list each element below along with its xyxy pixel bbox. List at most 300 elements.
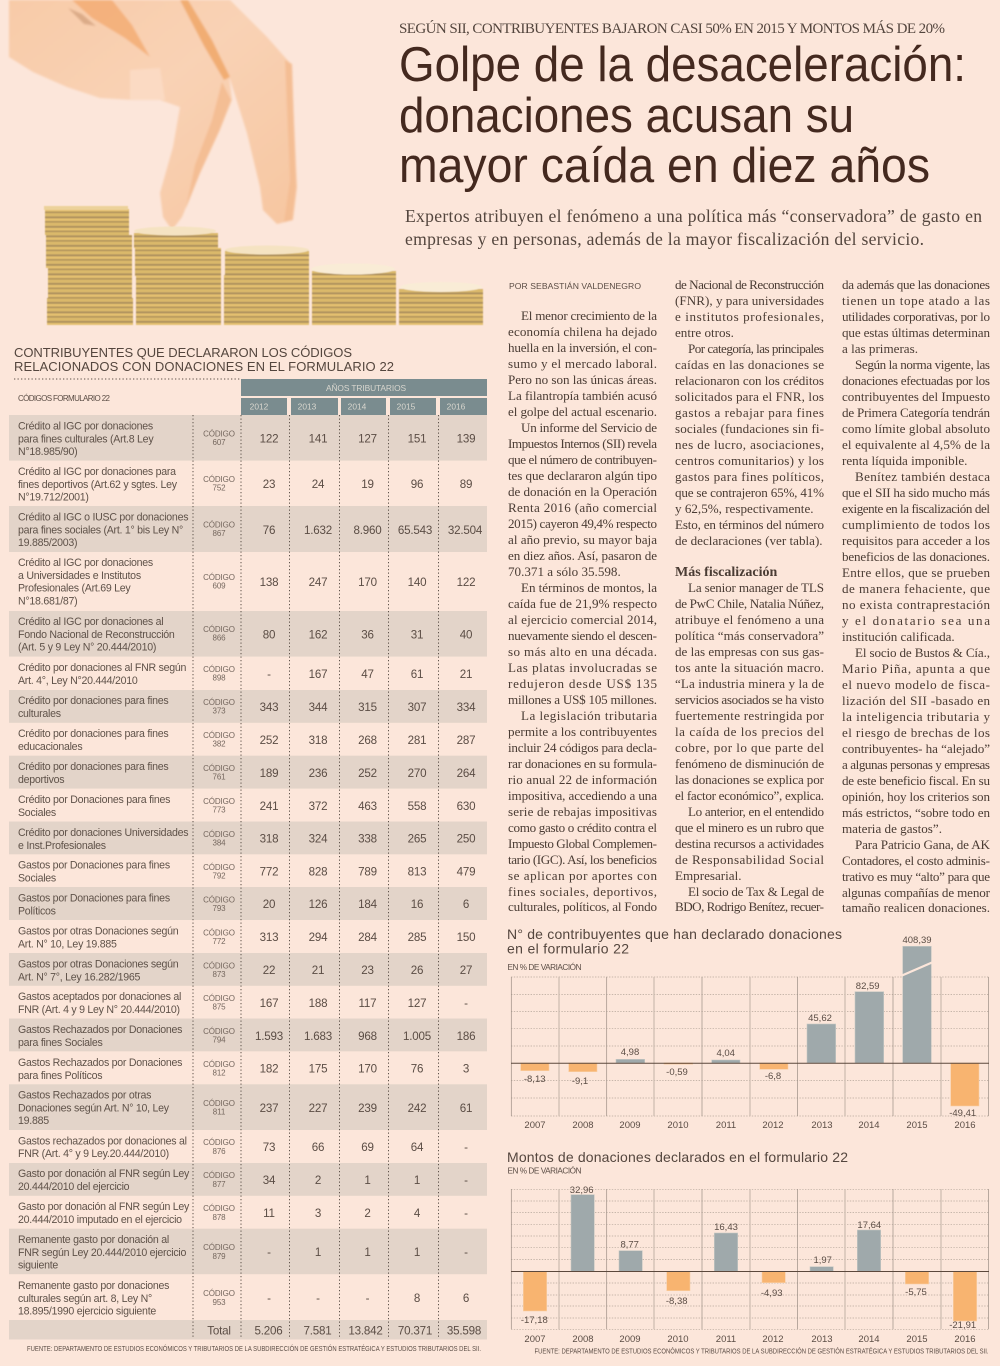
row: código 877	[9, 1163, 487, 1196]
row: código 609: 247	[309, 576, 327, 589]
row: código 772: 772	[212, 937, 226, 946]
row: código 877: Gasto por donación al FNR según Ley	[18, 1168, 190, 1180]
article column 2: El socio de Tax & Legal de	[688, 884, 824, 899]
chart 2: donation amounts declared, % change: 1,97	[813, 1255, 832, 1266]
article column 3: y el donatario sea una	[842, 613, 990, 628]
chart 1: taxpayers declaring donations, % change: 2007	[524, 1120, 546, 1131]
chart 1: taxpayers declaring donations, % change: 2008	[572, 1120, 594, 1131]
row: código 867: Crédito al IGC o IUSC por donaciones	[18, 512, 188, 524]
row: código 878: CÓDIGO	[203, 1204, 235, 1213]
article column 1	[508, 308, 657, 914]
row: código 609: 140	[408, 576, 426, 589]
chart 1 heading: en el formulario 22	[507, 940, 629, 956]
coin stack 3	[224, 246, 309, 325]
row: código 812: 3	[463, 1062, 469, 1076]
row: código 878: 3	[315, 1207, 321, 1220]
row: código 953: Remanente gasto por donaciones	[18, 1280, 169, 1292]
chart 2: donation amounts declared, % change: 2016	[954, 1334, 976, 1345]
row: código 878: 2	[364, 1207, 371, 1220]
row: código 793: 20	[263, 898, 275, 911]
row: totals: 5.206	[254, 1324, 283, 1338]
row: código 792: CÓDIGO	[203, 863, 235, 872]
row: código 811: CÓDIGO	[203, 1099, 235, 1108]
coin stack 5	[399, 282, 483, 325]
article column 2: sociales (fundaciones sin fi-	[675, 421, 824, 436]
row: código 761: 252	[358, 767, 377, 780]
chart 1 heading: N° de contribuyentes que han declarado donaciones	[507, 926, 842, 942]
article column 3: beneficios de las donaciones.	[842, 549, 990, 564]
chart 2: donation amounts declared, % change: -17,18	[521, 1315, 548, 1326]
article column 3: Contadores, el costo adminis-	[842, 853, 990, 868]
article column 3	[842, 277, 991, 915]
row: código 772: 150	[457, 931, 475, 944]
row: código 898	[18, 662, 472, 687]
row: código 875: 875	[212, 1002, 226, 1012]
article column 2: el factor económico”, explica.	[675, 788, 824, 803]
article column 2: cobre, por lo que parte del	[675, 740, 824, 755]
chart 1: taxpayers declaring donations, % change: -8,13	[524, 1074, 546, 1085]
row: código 876	[18, 1136, 468, 1160]
row: código 812: 812	[212, 1068, 226, 1078]
row: código 382	[18, 728, 475, 753]
article column 2: e institutos profesionales,	[675, 309, 824, 324]
article column 3: da además que las donaciones	[842, 277, 990, 292]
row: código 953: culturales según art. 8, Ley N°	[18, 1293, 152, 1305]
row: código 384: 324	[309, 832, 328, 846]
axis break on 2015 bar	[902, 962, 932, 976]
article column 3: tienen un tope atado a las	[842, 293, 990, 308]
row: código 752: 19	[361, 478, 374, 491]
row: código 877: 20.444/2010 del ejercicio	[18, 1181, 130, 1193]
row: código 772: 284	[358, 931, 378, 944]
article column 1: economía chilena ha dejado	[508, 324, 657, 339]
row: código 773: Crédito por Donaciones para fines	[18, 794, 170, 806]
row: código 609: 138	[260, 576, 278, 589]
article column 3: que el SII ha sido mucho más	[842, 485, 990, 500]
article column 1: en diez años. Así, pasaron de	[508, 548, 657, 563]
row: código 752: 96	[411, 478, 423, 491]
row: código 867: 65.543	[398, 524, 432, 537]
article column 1: como gasto o crédito contra el	[508, 820, 657, 835]
row: código 373	[9, 690, 487, 723]
article column 3: opinión, hoy los criterios son	[842, 789, 990, 804]
chart 1: taxpayers declaring donations, % change: 82,59	[856, 981, 880, 992]
row: código 898: 61	[411, 668, 423, 681]
article column 2: de Nacional de Reconstrucción	[675, 277, 824, 292]
article column 3: exigente en la fiscalización del	[842, 501, 990, 516]
chart 1: taxpayers declaring donations, % change: 2015	[906, 1120, 928, 1131]
row: código 811: 19.885	[18, 1115, 49, 1127]
article column 1: La filantropía también acusó	[508, 388, 657, 403]
row: código 873: 27	[460, 964, 472, 977]
row: código 812: para fines Políticos	[18, 1070, 102, 1082]
row: código 792: 789	[358, 866, 377, 878]
row: totals: Total	[207, 1324, 231, 1338]
row: código 792: 479	[457, 866, 475, 878]
row: código 772: Gastos por otras Donaciones según	[18, 926, 179, 938]
article column 2: Lo anterior, en el entendido	[688, 804, 824, 819]
article column 2: de las empresas con sus gas-	[675, 644, 824, 659]
row: código 772: 285	[408, 931, 426, 944]
byline: POR SEBASTIÁN VALDENEGRO	[509, 281, 641, 291]
row: código 873: Gastos por otras Donaciones según	[18, 958, 179, 970]
row: código 792: Sociales	[18, 872, 56, 884]
row: código 811: 811	[213, 1108, 226, 1116]
row: código 879: 1	[414, 1246, 420, 1259]
row: código 761	[9, 756, 487, 789]
chart 1 heading	[507, 926, 842, 972]
row: código 792: Gastos por Donaciones para fines	[18, 860, 170, 872]
row: código 794: 1.593	[255, 1030, 283, 1043]
table: donation codes by tax year	[9, 379, 487, 1340]
row: código 609: N°18.681/87)	[18, 595, 77, 607]
row: código 875: 117	[359, 997, 376, 1010]
article column 1: Las platas involucradas se	[508, 660, 657, 675]
chart 2: donation amounts declared, % change: -21,91	[949, 1320, 976, 1331]
article column 1: En términos de montos, la	[521, 580, 657, 595]
row: código 879: -	[464, 1246, 468, 1259]
row: código 866: Crédito al IGC por donaciones al	[18, 616, 163, 628]
article column 3: que estas últimas determinan	[842, 325, 990, 340]
row: código 761: 189	[260, 767, 278, 780]
row: código 811: 227	[309, 1102, 327, 1115]
row: código 877: CÓDIGO	[203, 1171, 235, 1180]
article column 3: Mario Piña, apunta a que	[842, 661, 990, 676]
row: código 875	[18, 991, 468, 1016]
article column 2: relacionaron con los créditos	[675, 373, 824, 388]
article column 3: donaciones efectuadas por los	[842, 373, 990, 388]
row: código 878: 11	[263, 1207, 275, 1220]
row: código 898: CÓDIGO	[203, 665, 235, 674]
chart 2 heading	[507, 1149, 848, 1176]
article column 1: al ejercicio comercial 2014,	[508, 612, 657, 627]
article column 1: 2015) cayeron 49,4% respecto	[508, 516, 657, 531]
article column 3: Entre ellos, que se prueben	[842, 565, 990, 580]
row: código 867: 76	[263, 524, 275, 537]
row: código 879: CÓDIGO	[203, 1243, 235, 1252]
chart 1 heading: EN % DE VARIACIÓN	[508, 962, 582, 972]
article column 2: que el minero es un rubro que	[675, 820, 824, 835]
row: código 811: 239	[358, 1102, 377, 1115]
row: código 878: 20.444/2010 imputado en el ejercicio	[18, 1214, 182, 1226]
table header: form codes label: CÓDIGOS FORMULARIO 22	[18, 394, 111, 403]
article column 2: entre otros.	[675, 325, 734, 340]
row: código 794: 186	[457, 1030, 475, 1043]
row: código 812: 76	[411, 1062, 423, 1076]
row: código 877: -	[464, 1174, 468, 1187]
row: código 812: 170	[358, 1062, 377, 1076]
chart 1: taxpayers declaring donations, % change: 4,98	[621, 1047, 639, 1058]
row: código 609: 170	[358, 576, 377, 589]
article column 3: de este beneficio fiscal. En su	[842, 773, 990, 788]
chart 1: taxpayers declaring donations, % change: 2013	[811, 1120, 833, 1131]
row: código 382: CÓDIGO	[203, 731, 235, 740]
row: código 898: 21	[460, 668, 472, 681]
row: código 866: 31	[411, 628, 423, 642]
article column 2: Más fiscalización	[675, 565, 777, 580]
row: código 876: 69	[361, 1141, 374, 1154]
row: código 773: 773	[212, 806, 226, 814]
row: código 384: e Inst.Profesionales	[18, 840, 106, 852]
chart 2: donation amounts declared, % change: 16,43	[714, 1222, 738, 1233]
row: código 772: 294	[309, 931, 328, 944]
deck: empresas y en personas, además de la mayor fiscalización del servicio.	[405, 229, 924, 249]
row: código 752: 24	[312, 478, 325, 491]
article column 3: institución calificada.	[842, 629, 955, 644]
row: código 761: 761	[212, 772, 226, 782]
article column 1: serie de rebajas impositivas	[508, 804, 657, 819]
row: código 609: 122	[457, 576, 475, 589]
article column 1: el golpe del actual escenario.	[508, 404, 657, 419]
row: código 876: 66	[312, 1141, 324, 1154]
row: código 898: Crédito por donaciones al FNR según	[18, 662, 187, 674]
title: donaciones acusan su	[399, 89, 854, 143]
row: código 879: 1	[315, 1246, 321, 1259]
row: código 793	[9, 887, 487, 920]
article column 3: de Primera Categoría tendrán	[842, 405, 990, 420]
article column 2: tos ante la situación macro.	[675, 660, 824, 675]
row: código 811: 61	[460, 1102, 472, 1115]
row: código 794: 968	[358, 1030, 377, 1043]
row: código 873: Art. N° 7°, Ley 16.282/1965	[18, 972, 141, 984]
article column 1: huella en la inversión, el con-	[508, 340, 657, 355]
title: mayor caída en diez años	[399, 139, 930, 193]
article column 1: se aplican por aportes con	[508, 868, 657, 883]
row: código 794: CÓDIGO	[203, 1027, 235, 1036]
article column 1: 70.371 a sólo 35.598.	[508, 564, 621, 579]
row: código 812	[18, 1057, 469, 1082]
article column 1: tario (IGC). Así, los beneficios	[508, 852, 657, 867]
chart 1: taxpayers declaring donations, % change: 45,62	[808, 1013, 832, 1024]
row: código 607: 151	[408, 432, 426, 446]
article column 2: política “más conservadora”	[675, 628, 824, 643]
row: código 752: 752	[212, 484, 226, 492]
row: totals: 35.598	[447, 1324, 481, 1338]
row: código 867: para fines sociales (Art. 1° bis Ley N°	[18, 524, 183, 536]
row: código 878	[18, 1201, 468, 1226]
row: código 876: CÓDIGO	[203, 1138, 235, 1147]
row: código 875: CÓDIGO	[203, 994, 235, 1003]
row: código 877: 2	[315, 1174, 321, 1187]
chart 1: taxpayers declaring donations, % change: 408,39	[902, 935, 932, 946]
article column 1: impositiva, accediendo a una	[508, 788, 657, 803]
row: código 373: Crédito por donaciones para fines	[18, 695, 168, 707]
row: código 873: 22	[263, 964, 275, 977]
row: código 761: 270	[408, 767, 426, 780]
chart 2: donation amounts declared, % change: 8,77	[620, 1240, 639, 1250]
chart 2: donation amounts declared, % change: 2010	[667, 1334, 689, 1345]
chart 2: donation amounts declared, % change: 32,96	[570, 1185, 594, 1196]
article column 3: más estrictos, “sobre todo en	[842, 805, 990, 820]
row: código 867: 19.885/2003)	[18, 537, 77, 549]
article column 1: redujeron desde US$ 135	[508, 676, 657, 691]
article column 2: de Responsabilidad Social	[675, 852, 824, 867]
article column 1: tes que declararon algún tipo	[508, 468, 657, 483]
row: código 875: Gastos aceptados por donaciones al	[18, 991, 181, 1003]
row: código 879	[9, 1229, 487, 1274]
article column 3: el nuevo modelo de fisca-	[842, 677, 990, 692]
row: código 879: FNR según Ley 20.444/2010 ejercicio	[18, 1247, 187, 1259]
chart 1: taxpayers declaring donations, % change: 2011	[716, 1120, 736, 1131]
row: código 953: 953	[212, 1298, 226, 1307]
chart 2: donation amounts declared, % change: 17,64	[857, 1220, 881, 1231]
table header: tax years: 2014	[348, 402, 367, 412]
row: código 794: Gastos Rechazados por Donaciones	[18, 1024, 182, 1036]
article column 1: que el número de contribuyen-	[508, 452, 657, 467]
chart 1: taxpayers declaring donations, % change: 2009	[619, 1120, 641, 1131]
table heading: RELACIONADOS CON DONACIONES EN EL FORMULARIO 22	[14, 359, 394, 374]
chart 2 heading: Montos de donaciones declarados en el formulario 22	[507, 1149, 848, 1165]
row: código 953: 18.895/1990 ejercicio siguiente	[18, 1306, 156, 1318]
row: totals: 7.581	[303, 1324, 332, 1338]
chart 2: donation amounts declared, % change: 2014	[858, 1334, 880, 1345]
article column 1: nuevamente siendo el descen-	[508, 628, 657, 643]
article column 1: de donación en la Operación	[508, 484, 657, 499]
article column 3: materia de gastos”.	[842, 821, 942, 836]
row: código 866: CÓDIGO	[203, 625, 235, 634]
row: código 877: 877	[212, 1180, 226, 1189]
row: código 953	[18, 1280, 469, 1318]
row: código 953: 8	[414, 1292, 420, 1305]
row: código 879: Remanente gasto por donación al	[18, 1234, 169, 1246]
article column 1: La legislación tributaria	[521, 708, 657, 723]
row: código 384: Crédito por donaciones Universidades	[18, 827, 188, 839]
row: código 384: 265	[408, 832, 426, 846]
chart 2: donation amounts declared, % change: 2013	[811, 1334, 833, 1345]
article column 1: millones a US$ 105 millones.	[508, 692, 657, 707]
article column 2: destina recursos a actividades	[675, 836, 824, 851]
row: código 812: Gastos Rechazados por Donaciones	[18, 1057, 182, 1069]
row: código 793: Gastos por Donaciones para fines	[18, 892, 170, 904]
chart 1: taxpayers declaring donations, % change: 4,04	[716, 1048, 735, 1059]
row: código 873: 21	[312, 964, 324, 977]
article column 3: la inteligencia tributaria y	[842, 709, 990, 724]
article column 1: rar donaciones en su formula-	[508, 756, 657, 771]
article column 2: que se contrajeron 65%, 41%	[675, 485, 824, 500]
row: código 373: 373	[212, 706, 226, 716]
row: código 773: CÓDIGO	[203, 797, 235, 806]
row: código 878: 4	[414, 1207, 421, 1220]
row: código 609: Crédito al IGC por donaciones	[18, 557, 153, 569]
row: código 384: 384	[212, 838, 226, 848]
article column 1: El menor crecimiento de la	[521, 308, 657, 323]
article column 2: de PwC Chile, Natalia Núñez,	[675, 596, 824, 611]
row: código 773: 241	[260, 800, 278, 813]
chart 2: donation amounts declared, % change	[511, 1185, 989, 1345]
article column 1: Pero no son las únicas áreas.	[508, 372, 657, 387]
article column 2: Por categoría, las principales	[688, 341, 824, 356]
photo: hand walking down stacks of coins	[9, 0, 483, 325]
row: código 877: 34	[263, 1174, 276, 1187]
article column 1: so más alto en una década.	[508, 644, 657, 659]
article column 2: atribuye el fenómeno a una	[675, 612, 824, 627]
article column 2: centros comunitarios) y los	[675, 453, 824, 468]
row: totals: 70.371	[398, 1324, 432, 1338]
row: código 792: 772	[260, 866, 278, 878]
article column 2: la caída de los precios del	[675, 724, 824, 739]
row: código 373: 334	[457, 701, 476, 714]
row: código 382: 268	[358, 734, 377, 747]
row: código 373: 343	[260, 701, 278, 714]
chart 1: taxpayers declaring donations, % change: -6,8	[765, 1071, 781, 1082]
row: código 772	[18, 926, 475, 950]
article column 2: Esto, en términos del número	[675, 517, 824, 532]
table header: tax years	[241, 379, 487, 415]
row: código 382: 382	[212, 740, 226, 748]
article column 1: rio anual 22 de información	[508, 772, 657, 787]
table heading: CONTRIBUYENTES QUE DECLARARON LOS CÓDIGOS	[14, 345, 352, 360]
row: código 794	[9, 1018, 487, 1051]
row: código 794: 1.683	[304, 1030, 332, 1043]
row: código 878: 878	[212, 1213, 226, 1222]
article column 1: permite a los contribuyentes	[508, 724, 657, 739]
row: código 875: FNR (Art. 4 y 9 Ley N° 20.444/2010)	[18, 1004, 180, 1016]
coin stack 1	[44, 206, 133, 325]
row: código 873: CÓDIGO	[203, 962, 235, 970]
row: código 898: 167	[309, 668, 327, 681]
article column 2: fuertemente restringida por	[675, 708, 825, 723]
row: código 879: siguiente	[18, 1260, 58, 1272]
row: código 607: 122	[260, 432, 278, 446]
row: código 761: 264	[457, 767, 476, 780]
row: código 876: FNR (Art. 4° y 9 Ley.20.444/2010)	[18, 1148, 169, 1160]
row: código 875: -	[464, 997, 468, 1010]
chart 1: taxpayers declaring donations, % change: -9,1	[572, 1076, 588, 1087]
row: código 773: 463	[358, 800, 377, 813]
chart 2: donation amounts declared, % change: 2011	[716, 1334, 736, 1345]
row: código 607: 141	[309, 432, 327, 446]
row: código 953: 6	[463, 1292, 469, 1305]
chart 2: donation amounts declared, % change: -4,93	[761, 1288, 783, 1299]
article column 3: tamaño realicen donaciones.	[842, 900, 990, 915]
row: código 811	[9, 1084, 487, 1130]
article column 3: el equivalente al 4,5% de la	[842, 437, 990, 452]
row: código 607: 139	[457, 432, 475, 446]
row: código 373: 344	[309, 701, 328, 714]
row: código 772: Art. N° 10, Ley 19.885	[18, 938, 117, 950]
row: código 607: Crédito al IGC por donaciones	[18, 420, 153, 432]
article column 3: como límite global absoluto	[842, 421, 990, 436]
row: código 953: -	[366, 1292, 370, 1305]
row: código 879: 879	[212, 1252, 226, 1261]
row: código 607: 127	[358, 432, 377, 446]
row: código 792: 813	[408, 866, 426, 878]
row: código 873: 23	[361, 964, 374, 977]
row: código 607: N°18.985/90)	[18, 446, 77, 458]
row: código 609: a Universidades e Institutos	[18, 570, 141, 582]
chart 2: donation amounts declared, % change: -8,38	[666, 1296, 688, 1307]
row: totals: 13.842	[348, 1324, 383, 1338]
row: código 384: CÓDIGO	[203, 830, 235, 839]
row: código 875: 188	[309, 997, 327, 1010]
row: código 812: CÓDIGO	[203, 1060, 235, 1069]
row: código 373: 315	[358, 701, 377, 714]
title: Golpe de la desaceleración:	[399, 38, 966, 92]
row: código 794: para fines Sociales	[18, 1037, 103, 1049]
row: código 773: 372	[309, 800, 327, 813]
article column 1: Un informe del Servicio de	[521, 420, 657, 435]
row: código 761: 236	[309, 767, 327, 780]
row: código 877: 1	[364, 1174, 371, 1187]
row: código 876: 73	[263, 1141, 275, 1154]
article column 1: Renta 2016 (año comercial	[508, 500, 657, 515]
row: código 867	[9, 506, 487, 552]
row: código 953: -	[316, 1292, 320, 1305]
article column 3: trativo es muy “alto” para que	[842, 869, 990, 884]
row: código 953: -	[267, 1292, 271, 1305]
article column 3: lización del SII -basado en	[842, 693, 990, 708]
article column 2: solicitados para el FNR, los	[675, 389, 824, 404]
